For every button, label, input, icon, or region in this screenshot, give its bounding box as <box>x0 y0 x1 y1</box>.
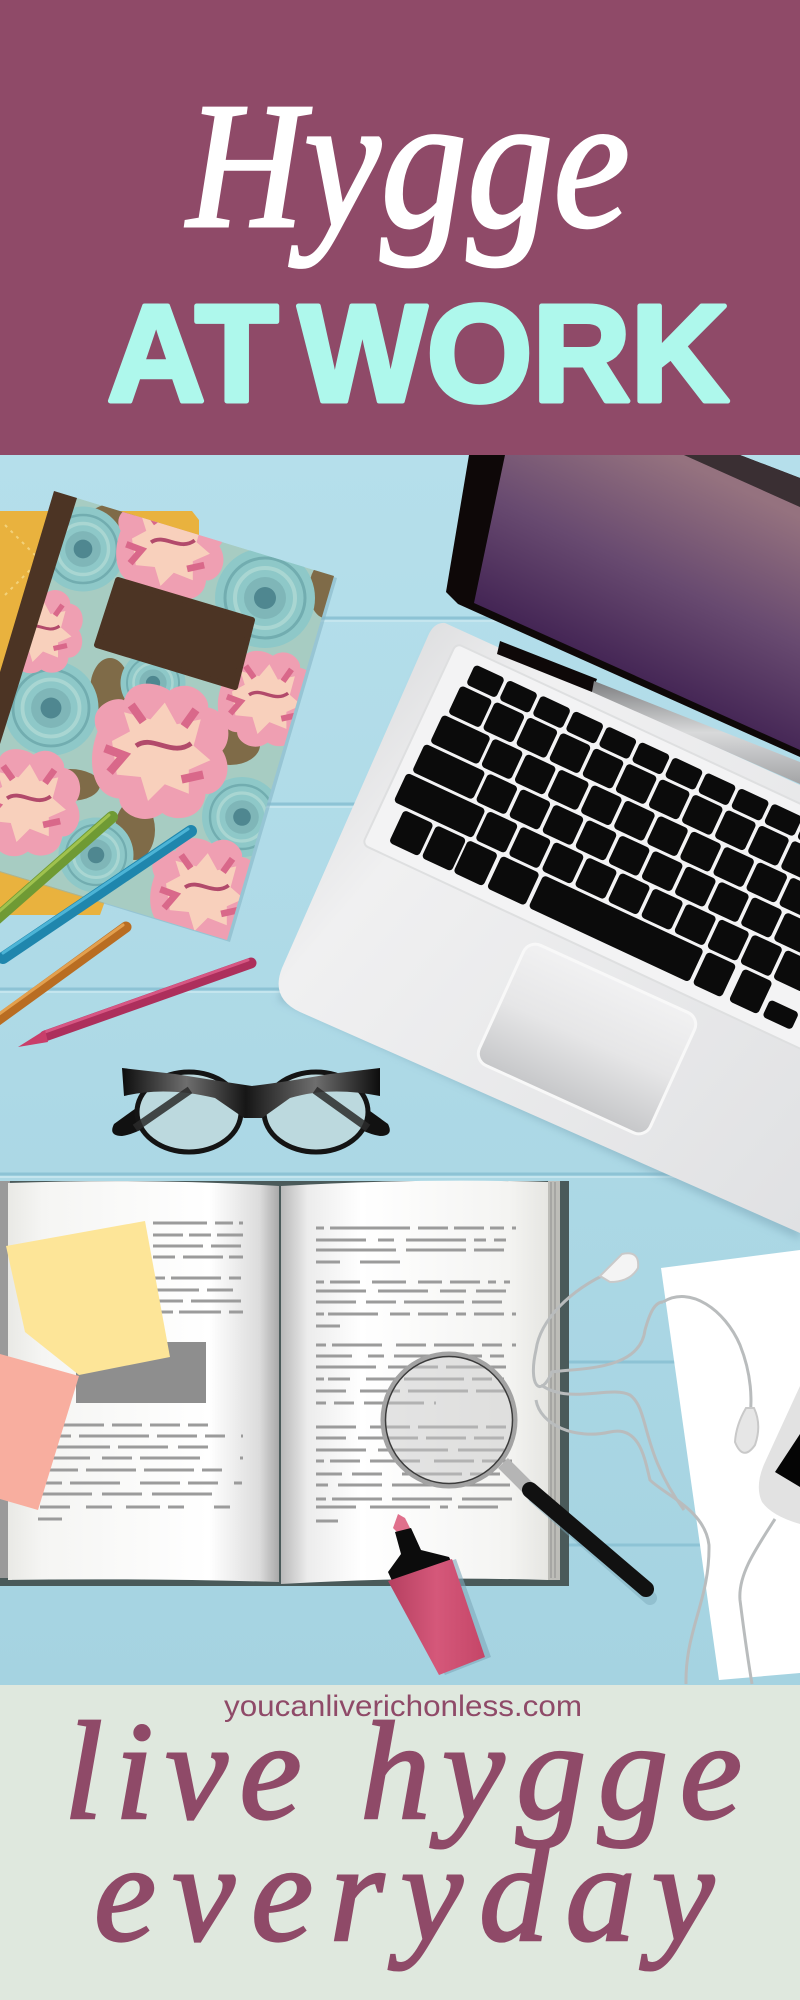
phone <box>759 1386 800 1524</box>
notebook: yellow back cover <box>0 511 199 915</box>
desk illustration <box>0 455 800 1685</box>
footer band <box>0 1685 800 2000</box>
notebook: floral front cover <box>0 491 341 945</box>
subtitle: AT WORK: AT WORK <box>107 277 729 431</box>
earphones <box>533 1253 775 1684</box>
sticky note: yellow <box>6 1221 170 1375</box>
pens <box>0 815 251 1047</box>
keyboard <box>362 643 800 1056</box>
highlighter marker <box>388 1514 491 1675</box>
title: Hygge: Hygge <box>185 57 630 268</box>
tagline: live hygge: live hygge <box>64 1694 742 1849</box>
glasses <box>112 1068 390 1152</box>
magnifying glass <box>383 1354 650 1598</box>
laptop screen <box>446 455 800 784</box>
desk background <box>0 455 800 1685</box>
tagline: everyday: everyday <box>94 1816 715 1971</box>
open book <box>0 1181 569 1586</box>
white paper <box>661 1250 800 1680</box>
laptop base <box>279 623 800 1233</box>
sticky note: pink <box>0 1354 79 1510</box>
header band <box>0 0 800 455</box>
laptop <box>278 455 800 1240</box>
book: photo placeholder <box>76 1342 206 1403</box>
earbud: left <box>600 1253 638 1282</box>
trackpad <box>474 940 700 1138</box>
earbud: right <box>735 1408 758 1453</box>
book: right page text lines <box>316 1228 516 1521</box>
book: left page text lines <box>38 1223 243 1519</box>
website url: youcanliverichonless.com <box>224 1690 582 1723</box>
